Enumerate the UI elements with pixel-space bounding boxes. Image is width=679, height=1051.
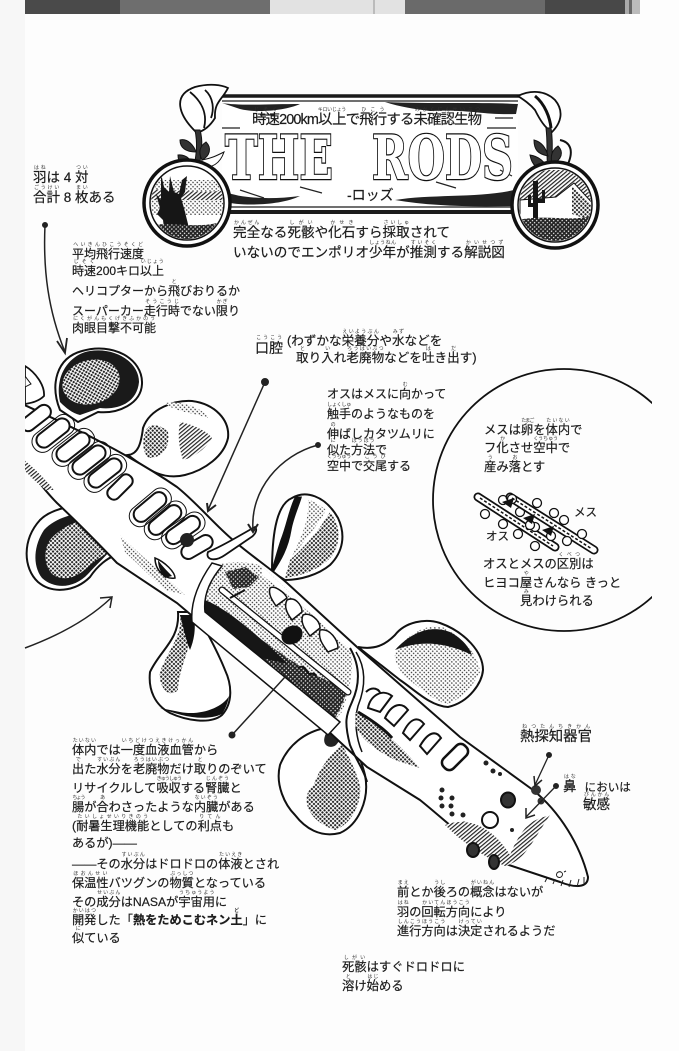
label: kidney: 保温性ほおんせい バツグンの物質ぶっしつ となっている [72,871,266,890]
label: mating: オスはメスに向む かって [327,382,446,401]
eye spots [467,792,515,869]
label: mouth note: 取と り入い れ老廃物ろうはいぶつ などを吐は き出だ す) [296,346,477,365]
label: kidney: その成分せいぶん はNASAが宇宙用うちゅうよう に [72,890,227,909]
label: kidney: ――その水分すいぶん はドロドロの体液たいえき とされ [72,852,279,871]
label: kidney [72,738,279,945]
label: corpse: 死骸しがい はすぐドロドロに [342,955,465,974]
dark overlap [502,498,554,536]
mountains [520,183,595,224]
bone skeleton [222,590,348,692]
inset text: difference: オスとメスの区別くべつ は [483,552,594,571]
medallion: deer [144,160,230,258]
label: corpse [342,954,465,993]
label: nose [563,774,631,812]
inset label: male: オス [486,531,509,543]
cutaway interior [197,562,352,725]
arrow: to nose [526,784,558,818]
arrow: to wing [42,222,67,353]
top scan bar [25,0,640,14]
label: mouth note: (わずかな栄養分えいようぶん や水みず などを [287,329,442,348]
banner frame lines [215,96,522,212]
label: nose: 鼻はな においは [563,774,631,794]
label: kidney: あるが)―― [72,836,137,850]
exposed dark node [180,533,194,547]
label: mating: 触手しょくしゅ のようなものを [327,402,435,421]
tentacle [207,527,256,559]
leaf: branch left [178,130,224,168]
desert scene [519,170,591,241]
organ node [281,626,303,644]
wing E [358,621,483,707]
label: nose: 敏感びんかん [583,792,610,812]
cactus [528,181,545,221]
label: speed [72,242,240,335]
arrow: left bottom [25,597,112,648]
arrow: to segment [207,378,268,511]
leaf: top left [180,85,228,133]
inset circle outline [433,369,679,631]
snout bristles [545,877,584,887]
label: direction: 前まえ とか後うし ろの概念がいねん はないが [397,880,543,899]
wing F [279,720,366,834]
label: kidney: (耐暑生理機能たいしょせいりきのう としての利点りてん も [72,814,234,833]
inset label: female: メス [574,507,597,519]
label: corpse: 溶と け始はじ める [342,974,404,993]
label: kidney: 腸ちょう が合あ わさったような内臓ないぞう がある [72,795,255,814]
inset text: eggs: メスは卵たまご を体内たいない で [484,418,582,437]
label: heat sensor: 熱探知器官ねつたんちきかん [520,724,592,745]
inset text: eggs: フ化か させ空中くうちゅう で [484,436,570,455]
leaf: branch right [530,128,571,170]
subtitle: 時速じそく 200km以上キロいじょう で飛行ひこう する未確認生物みかくにんせいぶつ [252,107,481,128]
body [18,402,588,887]
organ squiggles [230,590,316,676]
left shaded flank [24,460,54,490]
wood grain [222,102,518,206]
arrow: to organ [229,677,285,738]
title letters: THE RODS [225,123,513,194]
inset text: difference [483,552,621,608]
wing D [272,494,342,580]
deer silhouette [156,176,190,239]
inset text: difference: ヒヨコ屋や さんなら きっと [483,571,621,590]
segment row 3 [366,689,471,773]
inset text: eggs: 産う み落お とす [484,455,545,474]
label: speed: ヘリコプターから飛と びおりるか [72,279,240,298]
label: speed: 肉眼目撃不可能にくがんもくげきふかのう [72,316,156,335]
creature [18,348,588,887]
mini creatures [478,494,594,550]
label: wings: 羽はね は 4 対つい [33,165,89,185]
label: wings: 合計ごうけい 8 枚まい ある [33,185,116,205]
intro text: いないのでエンポリオ少年しょうねん が推測すいそく する解説図かいせつず [233,240,505,260]
intro text: 完全かんぜん なる死骸しがい や化石かせき すら採取さいしゅ されて [233,220,450,240]
medallion: desert [512,162,598,248]
nostril [557,871,566,877]
label: mating [327,382,446,473]
label: kidney: 体内たいない では一度血液血管いちどけつえきけっかん から [72,738,218,757]
wing A [55,348,142,422]
lower flank shading [355,712,420,768]
label: direction [397,880,555,938]
illustration: page and creature [24,0,652,888]
label: kidney: 出で た水分すいぶん を老廃物ろうはいぶつ だけ取と りのぞいて [72,757,267,776]
label: wings [33,164,116,205]
inset text: difference: 見み わけられる [520,589,594,608]
title letters: THE RODS: THE [225,123,333,194]
body outline [20,403,588,886]
label: mouth: 口腔こうこう [255,335,283,356]
inset text: eggs [484,418,582,474]
foreground [522,216,589,241]
leaf: top right [518,92,561,132]
label: mating: 空中くうちゅう で交尾こうび する [327,454,411,473]
label: mating: 似に た方法ほうほう で [327,438,387,457]
wing B [128,401,228,476]
label: speed: 時速じそく 200キロ以上いじょう [72,259,164,278]
deer scene [151,176,223,239]
head hatching [445,815,550,866]
label: speed: スーパーカー走行時そうこうじ でない限かぎ り [72,299,240,318]
mini male [478,496,555,550]
segment row 1 [18,402,135,502]
scale dots [438,760,502,826]
label: kidney: 似に ている [72,926,121,945]
header banner [144,85,598,258]
label: kidney: リサイクルして吸収きゅうしゅう する腎臓じんぞう と [72,776,242,795]
ribs [269,587,338,652]
wing C [27,505,114,590]
far-left tail wing [25,366,44,404]
arrow: to heat sensor [534,752,552,786]
segment row 2 [131,489,215,562]
segment scallops [28,410,209,553]
banner plaque [222,95,518,212]
arrow: to tentacle [248,442,320,532]
inset circle [433,369,679,631]
cutaway rim [192,563,340,735]
mini female [508,494,594,550]
label: mouth note [287,328,477,365]
label: direction: 進行方向しんこうほうこう は決定けってい されるようだ [397,919,555,938]
label: mating: 伸の ばしカタツムリに [327,422,435,441]
intro text [233,220,505,260]
title katakana: -ロッズ [347,187,394,203]
label: kidney: 開発かいはつ した「熱をためこむネン土ど 」に [72,908,267,927]
label: speed: 平均飛行速度へいきんひこうそくど [72,242,144,261]
wing G [150,612,230,721]
title letters: THE RODS: RODS [372,123,513,194]
label: direction: 羽はね の回転方向かいてんほうこう により [397,900,506,919]
